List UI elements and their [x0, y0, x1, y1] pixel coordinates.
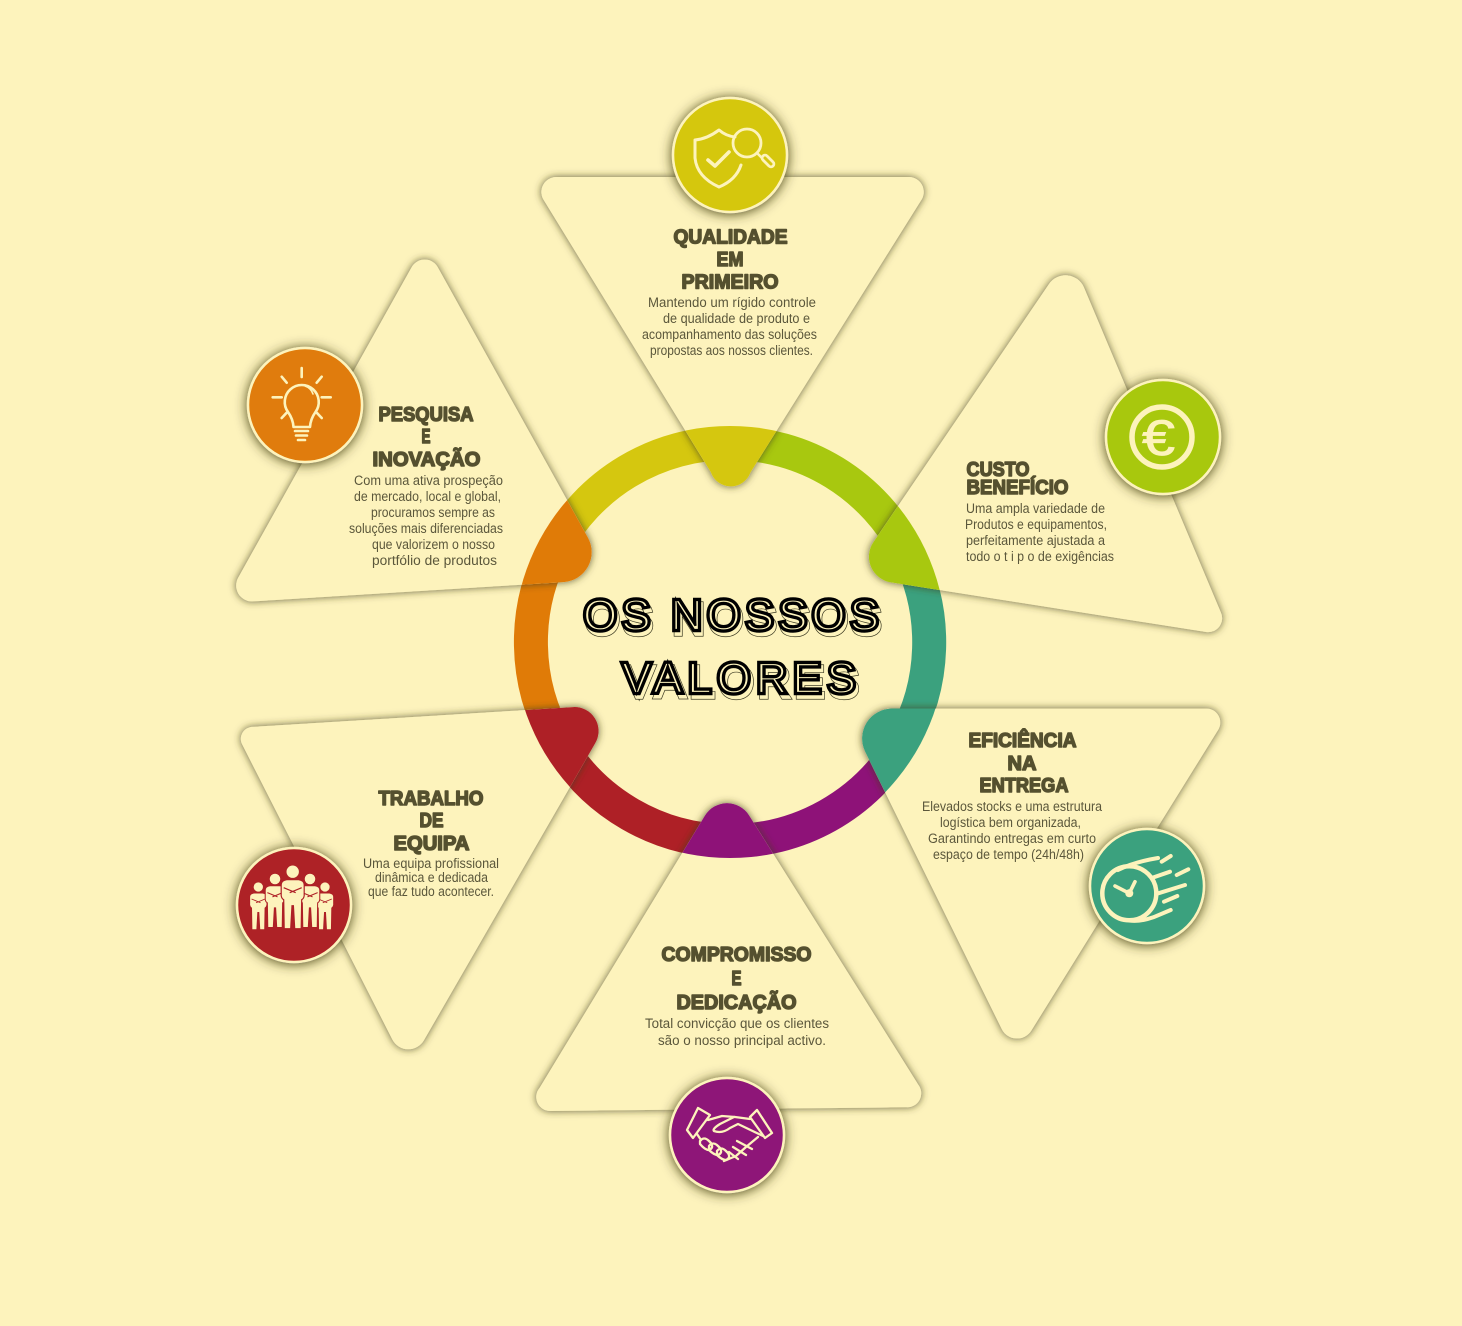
heading: pesquisa e inovação: INOVAÇÃO: [372, 448, 480, 471]
text: compromisso description: Total convicção que os clientes: [645, 1016, 829, 1031]
text: custo description: perfeitamente ajustada a: [966, 533, 1105, 548]
text: compromisso description: são o nosso principal activo.: [658, 1033, 826, 1048]
icon: euro coin: [1106, 380, 1220, 494]
title main lettering: OS NOSSOS: [583, 591, 879, 640]
heading: custo benefício: CUSTO: [966, 459, 1030, 481]
heading: pesquisa e inovação: PESQUISA: [378, 404, 474, 426]
panel: compromisso e dedicação: [536, 803, 921, 1192]
text: pesquisa description: portfólio de produtos: [372, 553, 497, 568]
text: trabalho description: [363, 856, 499, 899]
text: eficiência description: [922, 799, 1102, 862]
text: pesquisa description: [349, 473, 503, 568]
icon: flying clock: [1090, 829, 1204, 943]
icon: shield and magnifier: [673, 98, 787, 212]
heading: trabalho de equipa: TRABALHO: [378, 788, 484, 810]
text: custo description: todo o t i p o de exigências: [966, 549, 1114, 564]
icon: team of people: [237, 848, 351, 962]
panel: qualidade em primeiro: [541, 98, 924, 486]
title shadow outline: [585, 595, 881, 707]
heading: eficiência na entrega: ENTREGA: [980, 775, 1068, 797]
text: trabalho description: dinâmica e dedicada: [375, 870, 488, 885]
heading: qualidade em primeiro: QUALIDADE: [674, 226, 788, 248]
title shadow outline: OS NOSSOS: [585, 595, 881, 644]
heading: compromisso e dedicação: [662, 944, 812, 1014]
text: qualidade description: de qualidade de produto e: [663, 311, 810, 326]
text: eficiência description: logística bem organizada,: [940, 815, 1081, 830]
heading: pesquisa e inovação: [372, 404, 480, 471]
heading: eficiência na entrega: [968, 728, 1076, 797]
text: eficiência description: espaço de tempo (24h/48h): [933, 847, 1084, 862]
title main lettering: VALORES: [622, 654, 856, 703]
text: qualidade description: Mantendo um rígido controle: [648, 295, 816, 310]
heading: qualidade em primeiro: PRIMEIRO: [682, 272, 778, 294]
title main lettering: OS NOSSOS: [583, 591, 879, 640]
heading: eficiência na entrega: EFICIÊNCIA: [968, 728, 1076, 752]
heading: eficiência na entrega: NA: [1008, 753, 1036, 775]
icon: euro coin: €: [1142, 410, 1175, 466]
text: custo description: Uma ampla variedade de: [966, 501, 1105, 516]
icon: handshake: [670, 1078, 784, 1192]
text: eficiência description: Garantindo entregas em curto: [928, 831, 1096, 846]
icon: light bulb: [248, 348, 362, 462]
heading: compromisso e dedicação: E: [732, 968, 742, 990]
panel: pesquisa e inovação: [236, 260, 592, 602]
title: os nossos valores: [583, 591, 881, 707]
text: pesquisa description: procuramos sempre as: [371, 505, 495, 520]
panel: custo benefício: [869, 275, 1222, 632]
title shadow outline: VALORES: [624, 658, 858, 707]
text: custo description: [965, 501, 1114, 564]
heading: pesquisa e inovação: E: [422, 426, 430, 448]
text: compromisso description: [645, 1016, 829, 1048]
title main lettering: [583, 591, 879, 703]
heading: trabalho de equipa: DE: [420, 810, 444, 832]
text: eficiência description: Elevados stocks e uma estrutura: [922, 799, 1102, 814]
text: pesquisa description: soluções mais diferenciadas: [349, 521, 503, 536]
text: trabalho description: Uma equipa profissional: [363, 856, 499, 871]
heading: compromisso e dedicação: COMPROMISSO: [662, 944, 812, 966]
text: pesquisa description: Com uma ativa prospeção: [354, 473, 503, 488]
panel: trabalho de equipa: [237, 707, 599, 1049]
heading: compromisso e dedicação: DEDICAÇÃO: [676, 991, 796, 1014]
title main lettering: VALORES: [622, 654, 856, 703]
title shadow outline: OS NOSSOS: [585, 595, 881, 644]
ring: coloured circular band: [531, 443, 929, 841]
text: qualidade description: propostas aos nossos clientes.: [650, 343, 813, 358]
heading: trabalho de equipa: [378, 788, 484, 855]
heading: trabalho de equipa: EQUIPA: [394, 833, 470, 855]
text: pesquisa description: que valorizem o nosso: [372, 537, 495, 552]
text: qualidade description: acompanhamento das soluções: [642, 327, 817, 342]
text: pesquisa description: de mercado, local e global,: [354, 489, 501, 504]
title main lettering: VALORES: [622, 654, 856, 703]
heading: qualidade em primeiro: [674, 226, 788, 294]
title shadow outline: VALORES: [624, 658, 858, 707]
text: custo description: Produtos e equipamentos,: [965, 517, 1107, 532]
title main lettering: OS NOSSOS: [583, 591, 879, 640]
panel: eficiência na entrega: [862, 708, 1220, 1039]
text: trabalho description: que faz tudo acontecer.: [368, 884, 494, 899]
heading: custo benefício: BENEFÍCIO: [966, 476, 1068, 499]
heading: custo benefício: [966, 459, 1068, 499]
text: qualidade description: [642, 295, 817, 358]
heading: qualidade em primeiro: EM: [716, 249, 744, 271]
